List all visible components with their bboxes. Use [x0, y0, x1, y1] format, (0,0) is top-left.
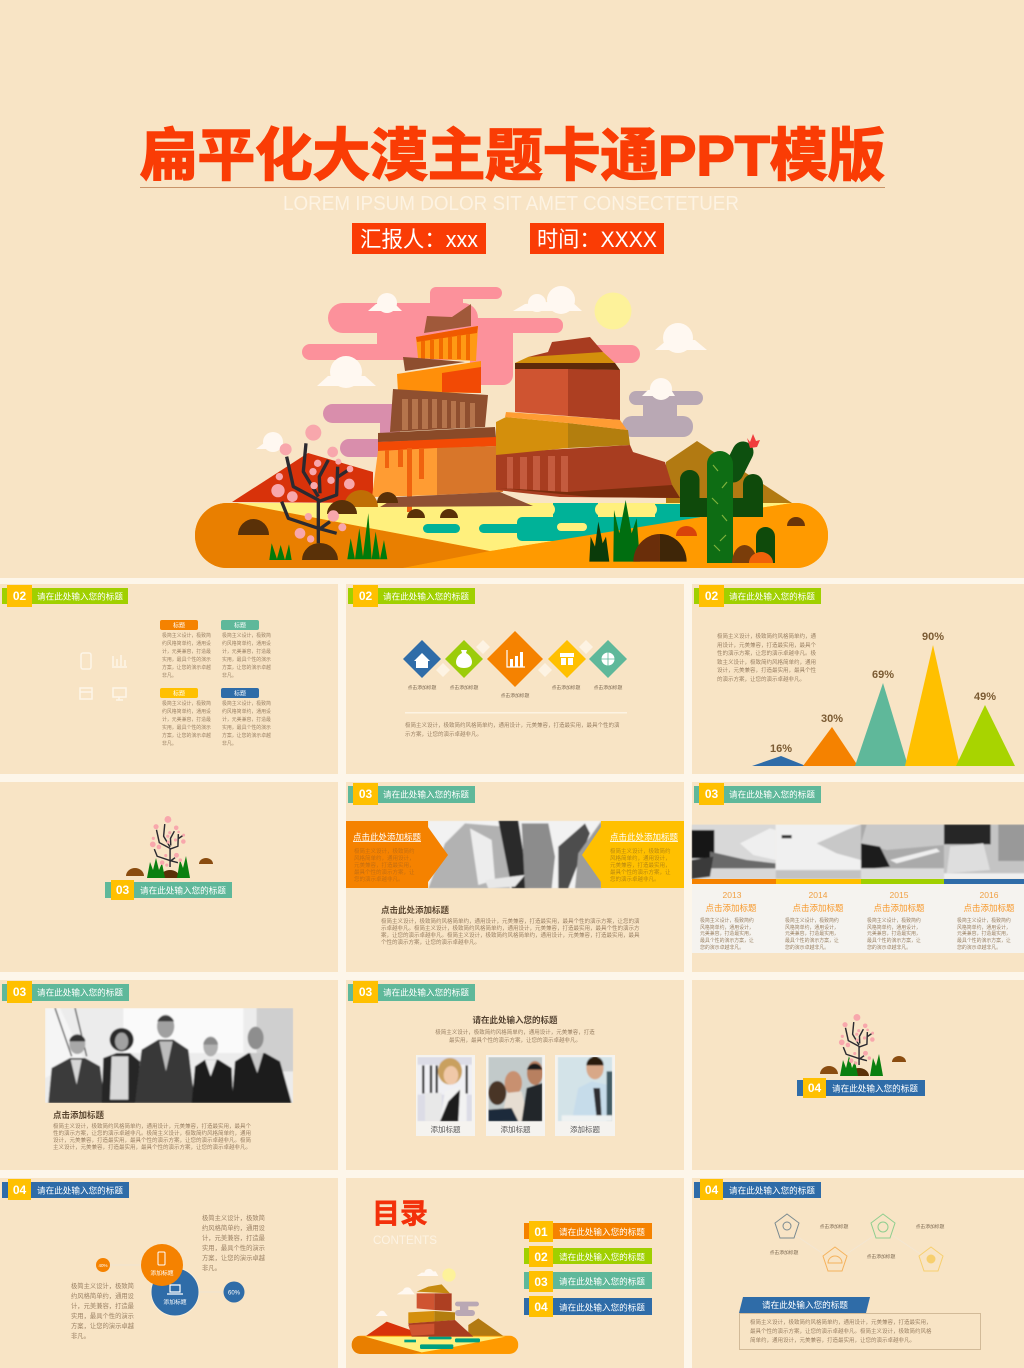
slide 12: pentagons [692, 1178, 1024, 1368]
date tag: 时间：XXXX [537, 227, 657, 252]
feature: yellow: 约风格简单约，通用设 [162, 708, 211, 715]
sun [594, 292, 632, 330]
blue circle [151, 1268, 199, 1316]
portrait card 1 [416, 1055, 475, 1136]
hero panel [0, 0, 1024, 578]
contents item 04: 04 [534, 1300, 548, 1314]
diamond: teal globe [589, 640, 627, 678]
text box: 简单约，通用设计，元美兼容，打造最实用，让您的演示卓越非凡。 [750, 1336, 915, 1344]
feature icons [80, 653, 127, 700]
portrait card 2 [486, 1055, 545, 1136]
column 2014: 元美兼容，打造最实用， [785, 930, 839, 937]
mini illustration [352, 1268, 518, 1354]
section tab 03: 请在此处输入您的标题 [729, 788, 815, 800]
body text: 性的演示方案，让您的演示卓越非凡。极 [717, 649, 817, 657]
column 2013 [700, 890, 757, 951]
column 2015: 风格简单约，通用设计， [867, 924, 921, 931]
body text: 设计，元美兼容，打造最实用，最具个性的演示方案，让您的演示卓越非凡。极简 [53, 1136, 252, 1144]
slide 8: three portraits [346, 980, 684, 1170]
column 2014: 极简主义设计，极致简约 [785, 917, 839, 924]
feature: blue: 实用，最具个性的演示 [222, 724, 271, 731]
grass right [589, 500, 687, 562]
column 2013: 元美兼容，打造最实用， [700, 930, 754, 937]
column 2015: 2015 [890, 890, 909, 900]
yellow arrow panel: 点击此处添加标题 [610, 832, 679, 842]
column 2014: 点击添加标题 [792, 903, 844, 913]
text box [740, 1314, 980, 1350]
small orange circle: 40% [98, 1263, 108, 1268]
body text: 示方案，让您的演示卓越非凡。 [405, 730, 482, 738]
triangle chart: 49% [974, 691, 996, 703]
feature: orange: 约风格简单约，通用设 [162, 640, 211, 647]
text left: 非凡。 [71, 1331, 90, 1340]
section tab 02: 请在此处输入您的标题 [37, 590, 123, 602]
contents item 03 [524, 1271, 652, 1292]
section tab 03 [694, 783, 821, 805]
column 2015: 点击添加标题 [873, 903, 925, 913]
feature: orange: 方案，让您的演示卓越 [162, 664, 211, 671]
contents item 04: 请在此处输入您的标题 [559, 1302, 645, 1312]
slide 9: section 04 divider [692, 980, 1024, 1170]
feature: yellow: 非凡。 [162, 740, 177, 747]
column 2013: 2013 [723, 890, 742, 900]
yellow arrow panel: 您的演示卓越非凡。 [610, 875, 660, 883]
icon: small tree [126, 816, 213, 878]
portrait card 3 [555, 1055, 615, 1136]
orange circle: 添加标题 [150, 1269, 174, 1277]
feature: teal: 约风格简单约，通用设 [222, 640, 271, 647]
title divider [140, 187, 885, 188]
feature: yellow: 实用，最具个性的演示 [162, 724, 211, 731]
orange arrow panel: 最具个性的演示方案，让 [354, 868, 415, 876]
section tab 03: 03 [359, 787, 372, 801]
contents item 03: 请在此处输入您的标题 [559, 1276, 645, 1286]
column 2014: 风格简单约，通用设计， [785, 924, 839, 931]
contents item 01 [524, 1221, 652, 1242]
orange circle [141, 1244, 183, 1286]
icon: cactus [680, 434, 775, 563]
photo heading: 点击添加标题 [53, 1110, 105, 1120]
diamond labels: 点击添加标题 [594, 684, 623, 691]
feature: blue: 计，元美兼容，打造最 [222, 716, 271, 723]
orange arrow panel [346, 821, 448, 888]
section tab 04: 请在此处输入您的标题 [37, 1184, 123, 1196]
diamond labels: 点击添加标题 [552, 684, 581, 691]
diamond labels [408, 684, 623, 699]
small blue circle: 60% [228, 1290, 241, 1296]
section tab 03: 请在此处输入您的标题 [140, 884, 226, 896]
blue circle: 添加标题 [163, 1298, 187, 1306]
contents item 01: 请在此处输入您的标题 [559, 1226, 645, 1237]
column 2013: 最具个性的演示方案，让 [700, 937, 754, 944]
slide 1: four features [0, 584, 338, 774]
section tab 03: 请在此处输入您的标题 [383, 986, 469, 998]
feature: blue: 标题 [234, 690, 246, 698]
column 2015: 元美兼容，打造最实用， [867, 930, 921, 937]
feature: orange [160, 620, 211, 679]
orange arrow panel: 您的演示卓越非凡。 [354, 875, 404, 883]
orange arrow panel: 风格简单约，通用设计， [354, 854, 415, 862]
section tab 02: 02 [359, 589, 372, 603]
subtitle: LOREM IPSUM DOLOR SIT AMET CONSECTETUER [283, 193, 739, 215]
pentagon labels: 点击添加标题 [916, 1223, 945, 1230]
body text: 主义设计，元美兼容，打造最实用，最具个性的演示方案，让您的演示卓越非凡。 [53, 1143, 251, 1151]
illustration: desert [195, 286, 828, 568]
colour strips [692, 879, 1024, 884]
column 2016: 点击添加标题 [963, 903, 1015, 913]
section tab 03: 请在此处输入您的标题 [37, 986, 123, 998]
yellow arrow panel: 风格简单约，通用设计， [610, 854, 671, 862]
yellow arrow panel: 最具个性的演示方案，让 [610, 868, 671, 876]
feature: orange: 实用，最具个性的演示 [162, 656, 211, 663]
feature: blue: 约风格简单约，通用设 [222, 708, 271, 715]
triangle chart [752, 631, 1015, 766]
column 2016: 元美兼容，打造最实用， [957, 930, 1011, 937]
feature: yellow [160, 688, 211, 747]
slide 11: contents [346, 1178, 684, 1368]
body text: 最实用，最具个性的演示方案，让您的演示卓越非凡。 [449, 1036, 581, 1044]
feature: blue: 方案，让您的演示卓越 [222, 732, 271, 739]
slide 2: diamonds [346, 584, 684, 774]
pentagon labels: 点击添加标题 [820, 1223, 849, 1230]
blue banner [739, 1297, 870, 1313]
section tab 04 [2, 1179, 129, 1200]
diamond: yellow gift [548, 640, 586, 678]
feature: orange: 非凡。 [162, 672, 177, 679]
section tab 04: 请在此处输入您的标题 [832, 1082, 918, 1094]
section tab 02: 02 [705, 589, 718, 603]
section tab 03: 03 [705, 787, 718, 801]
contents item 01: 01 [534, 1225, 548, 1239]
body text: 极简主义设计，极致简约风格简单约，通用设计，元美兼容，打造最实用，最具个 [53, 1122, 252, 1130]
section tab 04: 请在此处输入您的标题 [729, 1184, 815, 1196]
column 2014: 最具个性的演示方案，让 [785, 937, 839, 944]
lilac cloud [622, 391, 703, 437]
slide 10: circles [0, 1178, 338, 1368]
pentagon labels: 点击添加标题 [867, 1253, 896, 1260]
feature: orange: 标题 [173, 622, 185, 630]
pentagon labels [770, 1223, 945, 1260]
icon: blossom tree [271, 425, 355, 543]
pentagon: yellow [919, 1247, 943, 1271]
contents item 02: 请在此处输入您的标题 [559, 1251, 645, 1262]
diamond: green money bag [445, 640, 483, 678]
column 2016 [957, 890, 1015, 951]
section tab 02 [694, 585, 821, 607]
section tab 03: 03 [116, 883, 129, 897]
body text: 个性的演示方案，让您的演示卓越非凡。 [381, 938, 480, 946]
slide 6: timeline [692, 782, 1024, 972]
contents subtitle: CONTENTS [373, 1233, 437, 1247]
triangle chart: 16% [770, 743, 792, 755]
small orange circle [96, 1258, 110, 1272]
yellow arrow panel: 元美兼容，打造最实用， [610, 861, 671, 869]
column 2013: 点击添加标题 [705, 903, 757, 913]
blue banner: 请在此处输入您的标题 [762, 1299, 848, 1310]
domes [238, 490, 805, 560]
pink cloud [302, 287, 640, 385]
slide 5: photo band [346, 782, 684, 972]
section tab 04: 04 [808, 1081, 821, 1095]
orange arrow panel: 元美兼容，打造最实用， [354, 861, 415, 869]
column 2015 [867, 890, 925, 951]
column 2016: 极简主义设计，极致简约 [957, 917, 1011, 924]
section tab 03: 03 [359, 985, 372, 999]
yellow arrow panel: 极简主义设计，极致简约 [610, 847, 671, 855]
feature: teal: 标题 [234, 622, 246, 630]
column 2015: 您的演示卓越非凡。 [867, 944, 911, 951]
feature: teal: 方案，让您的演示卓越 [222, 664, 271, 671]
body text: 性的演示方案，让您的演示卓越非凡。极简主义设计，极致简约风格简单约，通用 [53, 1129, 251, 1137]
body text: 极简主义设计，极致简约风格简单约，通用设计，元美兼容，打造最实用，最具个性的演 [405, 721, 620, 729]
column 2016: 您的演示卓越非凡。 [957, 944, 1001, 951]
section tab 02 [348, 585, 475, 607]
small white diamonds [436, 640, 593, 677]
connector lines [795, 1235, 922, 1255]
body text: 设计，元美兼容，打造最实用，最具个性 [717, 666, 817, 674]
column 2015: 最具个性的演示方案，让 [867, 937, 921, 944]
column 2013: 您的演示卓越非凡。 [700, 944, 744, 951]
feature: teal [221, 620, 271, 679]
contents item 04 [524, 1296, 652, 1317]
orange arrow panel: 极简主义设计，极致简约 [354, 847, 415, 855]
connector lines [110, 1265, 226, 1292]
feature: yellow: 方案，让您的演示卓越 [162, 732, 211, 739]
ground [195, 503, 828, 568]
heading: 请在此处输入您的标题 [472, 1015, 558, 1025]
section tab 04: 04 [705, 1183, 718, 1197]
feature: yellow: 标题 [173, 690, 185, 698]
slide 7: team photo [0, 980, 338, 1170]
pentagon: green [871, 1214, 895, 1238]
column 2016: 最具个性的演示方案，让 [957, 937, 1011, 944]
body heading: 点击此处添加标题 [381, 905, 450, 915]
mauve cloud [323, 404, 403, 457]
column 2014 [785, 890, 844, 951]
diamond labels: 点击添加标题 [408, 684, 437, 691]
section tab 02: 请在此处输入您的标题 [729, 590, 815, 602]
column 2016: 2016 [980, 890, 999, 900]
triangle chart: 30% [821, 713, 843, 725]
feature: orange: 极简主义设计，极致简 [162, 632, 211, 639]
text right: 实用，最具个性的演示 [202, 1243, 265, 1252]
small blue circle [224, 1282, 244, 1302]
text left: 计，元美兼容，打造最 [71, 1301, 135, 1310]
body text: 极简主义设计，极致简约风格简单约，通用设计，元美兼容，打造 [435, 1028, 595, 1036]
pentagon labels: 点击添加标题 [770, 1249, 799, 1256]
section tab 03 [348, 981, 475, 1003]
feature: orange: 计，元美兼容，打造最 [162, 648, 211, 655]
body text: 极简主义设计，极致简约风格简单约，通 [717, 632, 817, 640]
text left: 方案，让您的演示卓越 [71, 1321, 135, 1330]
contents item 02: 02 [534, 1250, 548, 1264]
column 2013: 风格简单约，通用设计， [700, 924, 754, 931]
feature: yellow: 极简主义设计，极致简 [162, 700, 211, 707]
body text: 示卓越非凡。极简主义设计，极致简约风格简单约，通用设计，元美兼容，打造最实用，最具个性的演示方 [381, 924, 640, 932]
diamond: orange chart [487, 631, 543, 687]
feature: teal: 实用，最具个性的演示 [222, 656, 271, 663]
slide 4: section 03 divider [0, 782, 338, 972]
white clouds [256, 286, 707, 452]
grass left [269, 513, 387, 560]
section tab 03 [2, 981, 129, 1003]
feature: teal: 非凡。 [222, 672, 237, 679]
contents item 02 [524, 1246, 652, 1267]
body text: 案，让您的演示卓越非凡。极简主义设计，极致简约风格简单约，通用设计，元美兼容，打造最实用，最具 [381, 931, 640, 939]
text box: 最具个性的演示方案，让您的演示卓越非凡。极简主义设计，极致简约风格 [750, 1327, 932, 1335]
photo: team [428, 821, 602, 888]
triangle chart: 69% [872, 669, 894, 681]
tower [372, 304, 533, 512]
column 2014: 您的演示卓越非凡。 [785, 944, 829, 951]
pentagon: orange [823, 1247, 847, 1271]
column 2015: 极简主义设计，极致简约 [867, 917, 921, 924]
body text: 致主义设计，极致简约风格简单约，通用 [717, 658, 816, 666]
text right: 约风格简单约，通用设 [202, 1223, 266, 1232]
photo: business team [45, 1008, 293, 1103]
contents item 03: 03 [534, 1275, 548, 1289]
text right: 计，元美兼容，打造最 [202, 1233, 266, 1242]
feature: yellow: 计，元美兼容，打造最 [162, 716, 211, 723]
body text: 用设计，元美兼容，打造最实用，最具个 [717, 641, 817, 649]
mesa [496, 337, 680, 498]
text box: 极简主义设计，极致简约风格简单约，通用设计，元美兼容，打造最实用， [750, 1318, 932, 1326]
body text: 的演示方案，让您的演示卓越非凡。 [717, 675, 805, 683]
text left: 实用，最具个性的演示 [71, 1311, 134, 1320]
feature: blue: 非凡。 [222, 740, 237, 747]
triangle chart: 90% [922, 631, 944, 643]
text left: 约风格简单约，通用设 [71, 1291, 135, 1300]
timeline text panel [692, 884, 1024, 953]
feature: blue: 极简主义设计，极致简 [222, 700, 271, 707]
yellow arrow panel [582, 821, 684, 888]
column 2014: 2014 [809, 890, 828, 900]
section tab 03 [105, 880, 232, 900]
feature: teal: 计，元美兼容，打造最 [222, 648, 271, 655]
text right: 极简主义设计，极致简 [202, 1213, 265, 1222]
icon: small tree [820, 1014, 906, 1076]
portrait card 3: 添加标题 [570, 1124, 600, 1134]
portrait card 1: 添加标题 [430, 1124, 461, 1134]
section tab 02: 02 [13, 589, 26, 603]
diamond labels: 点击添加标题 [501, 692, 530, 699]
contents title: 目录 [372, 1198, 428, 1229]
column 2016: 风格简单约，通用设计， [957, 924, 1011, 931]
body text: 极简主义设计，极致简约风格简单约，通用设计，元美兼容，打造最实用，最具个性的演示方案，让您的演 [381, 917, 640, 925]
orange arrow panel: 点击此处添加标题 [353, 832, 422, 842]
reporter tag: 汇报人：xxx [360, 227, 478, 252]
section tab 02: 请在此处输入您的标题 [383, 590, 469, 602]
column 2013: 极简主义设计，极致简约 [700, 917, 754, 924]
section tab 04 [694, 1179, 821, 1200]
diamond labels: 点击添加标题 [450, 684, 479, 691]
slide 3: mountain chart [692, 584, 1024, 774]
section tab 02 [2, 585, 128, 607]
title: 扁平化大漠主题卡通PPT模版 [140, 124, 885, 188]
text left: 极简主义设计，极致简 [71, 1281, 134, 1290]
section tab 04 [797, 1078, 925, 1098]
diamond: blue home [403, 640, 441, 678]
photos strip [692, 824, 1024, 879]
feature: teal: 极简主义设计，极致简 [222, 632, 271, 639]
section tab 03 [348, 783, 475, 805]
text right: 非凡。 [202, 1263, 221, 1272]
section tab 04: 04 [13, 1183, 26, 1197]
text right: 方案，让您的演示卓越 [202, 1253, 266, 1262]
portrait card 2: 添加标题 [500, 1124, 531, 1134]
section tab 03: 03 [13, 985, 26, 999]
pentagon: grey [775, 1214, 799, 1238]
feature: blue [221, 688, 271, 747]
section tab 03: 请在此处输入您的标题 [383, 788, 469, 800]
hills [232, 453, 373, 503]
